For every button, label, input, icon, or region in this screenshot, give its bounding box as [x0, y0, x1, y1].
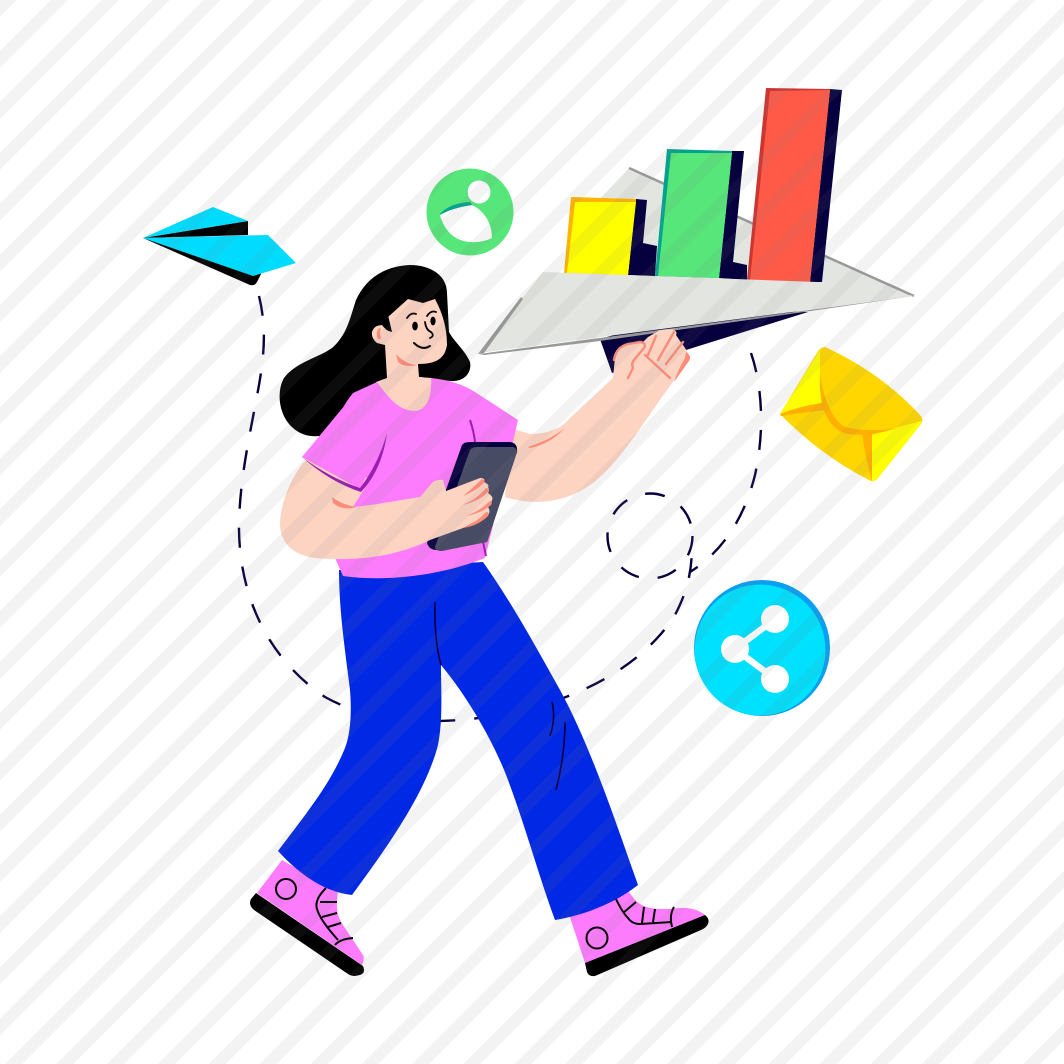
dashed flight path — [239, 296, 761, 721]
neck and face — [372, 299, 447, 414]
woman — [250, 265, 709, 976]
icon: user badge — [426, 168, 514, 256]
hair wedge by ear — [378, 315, 392, 332]
legs: blue trousers — [278, 562, 638, 920]
right shoe — [566, 880, 709, 976]
left shoe — [250, 860, 364, 976]
ear — [372, 325, 390, 345]
pink t-shirt — [302, 378, 518, 578]
tablet — [427, 442, 517, 551]
bar: yellow — [564, 197, 657, 276]
icon: envelope — [780, 347, 922, 482]
hair — [280, 265, 470, 436]
icon: share badge — [694, 580, 830, 716]
icon: cyan paper plane — [143, 207, 296, 285]
right arm and hand — [505, 329, 690, 502]
mouth — [414, 343, 430, 348]
eyes and brows — [412, 322, 418, 330]
back wing of plane — [578, 168, 914, 300]
sleeve with trim — [302, 405, 387, 492]
plane underside shadow — [600, 310, 808, 373]
bar: green — [655, 149, 747, 280]
neck shadow — [396, 354, 417, 366]
left arm and hand — [280, 450, 492, 559]
front wing of plane — [478, 272, 914, 355]
bar: red — [747, 88, 842, 282]
paper plane with bar chart — [478, 88, 914, 373]
